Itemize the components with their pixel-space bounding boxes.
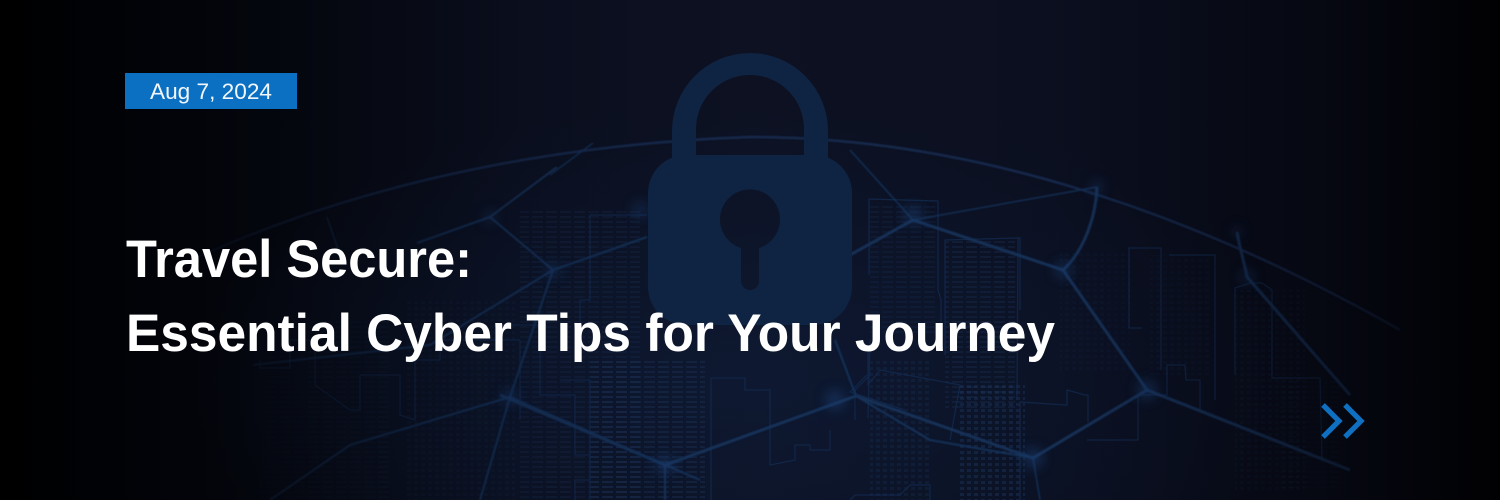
network lines <box>180 137 1400 500</box>
lock body with keyhole <box>648 155 852 325</box>
lock shackle <box>672 53 828 175</box>
globe arc <box>180 137 1400 330</box>
title <box>126 230 1055 363</box>
title line 2: Essential Cyber Tips for Your Journey <box>126 304 1055 363</box>
network glow <box>484 181 1254 474</box>
building outlines <box>260 199 1322 500</box>
date badge <box>125 73 297 109</box>
city skyline with network globe <box>180 137 1400 500</box>
padlock icon <box>648 53 852 325</box>
icon: double chevron arrow <box>1323 405 1361 437</box>
title line 1: Travel Secure: <box>126 230 472 289</box>
date text: Aug 7, 2024 <box>150 79 272 104</box>
city skyline windows <box>520 206 1299 500</box>
